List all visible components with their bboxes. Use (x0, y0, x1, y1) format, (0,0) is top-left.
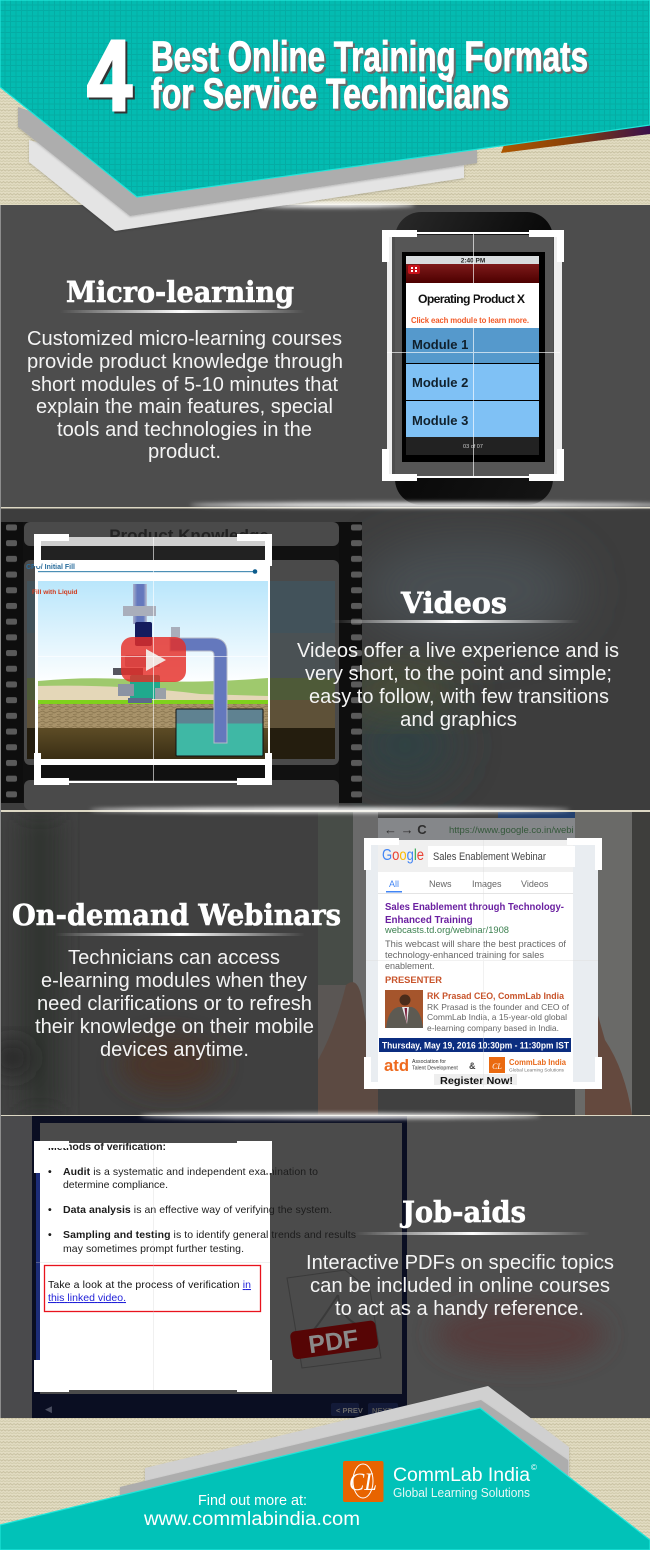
ribbon: grey layer (120, 1400, 568, 1510)
heading: on-demand webinars: On-demand Webinars (12, 898, 341, 932)
text: webinars description: their knowledge on their mobile (35, 1015, 314, 1038)
text: micro-learning description: explain the main features, special (36, 395, 333, 418)
video still: pump illustration: CPU/ Initial Fill (26, 564, 75, 571)
icon: smartphone: 03 of 07 (463, 444, 483, 450)
job aid document: may sometimes prompt further testing. (63, 1243, 244, 1255)
search result screenshot: Images (472, 879, 502, 889)
text: micro-learning description: tools and technologies in the (57, 418, 312, 441)
ribbon: grey layer (18, 107, 477, 216)
callout: linked video: Take a look at the process of verification in (48, 1279, 251, 1291)
browser toolbar: https://www.google.co.in/webi (449, 825, 574, 836)
crop frame: webinar (364, 838, 602, 1089)
icon: play button (121, 637, 186, 682)
photo: presenter (385, 990, 423, 1028)
text: micro-learning description: short modules of 5-10 minutes that (31, 373, 338, 396)
job aid document: Data analysis is an effective way of verifying the system. (63, 1204, 332, 1216)
logo: CommLab India (343, 1461, 384, 1502)
crop frame: job aid (34, 1141, 272, 1392)
search result screenshot: Register Now! (440, 1075, 513, 1087)
teal banner shape (0, 1408, 650, 1550)
icon: search engine logo: Google (382, 847, 424, 864)
text: videos description: easy to follow, with few transitions (309, 685, 609, 708)
search result screenshot: Videos (521, 879, 549, 889)
search result screenshot: News (429, 879, 452, 889)
crop frame: phone (382, 230, 564, 481)
search result screenshot: CL (492, 1062, 502, 1071)
course player window: ◀ (45, 1404, 52, 1414)
text: videos description: very short, to the point and simple; (305, 662, 612, 685)
callout: linked video: this linked video. (48, 1292, 126, 1304)
text: company name: CommLab India (393, 1465, 530, 1486)
text: videos description (297, 639, 619, 731)
search result screenshot: e-learning company based in India. (427, 1023, 559, 1033)
video still: pump illustration: Fill with Liquid (32, 589, 78, 596)
search result screenshot: Sales Enablement Webinar (433, 851, 546, 863)
title number: 4 (87, 20, 132, 132)
text: job-aids description: Interactive PDFs on specific topics (306, 1251, 614, 1274)
icon: pdf document: PDF (307, 1325, 360, 1359)
icon: pdf document (287, 1270, 381, 1368)
text: webinars description: need clarifications or to refresh (37, 992, 312, 1015)
icon: smartphone: 2:40 PM (461, 258, 485, 264)
icon: smartphone: Click each module to learn more. (411, 316, 529, 325)
text: company name: Global Learning Solutions (393, 1486, 530, 1500)
search result screenshot: Association for (412, 1059, 446, 1065)
icon: hands holding tablet (318, 982, 632, 1115)
crop frame: video (34, 534, 272, 785)
search result screenshot: technology-enhanced training for sales (385, 950, 545, 960)
text: videos description: Videos offer a live experience and is (297, 639, 619, 662)
footer banner (0, 1386, 650, 1550)
icon: smartphone (395, 212, 553, 505)
text: micro-learning description: provide product knowledge through (27, 350, 343, 373)
search result screenshot (366, 840, 598, 1087)
text: company name: © (531, 1463, 537, 1472)
search result screenshot: Talent Development (412, 1066, 458, 1072)
icon: smartphone: Module 1 (412, 337, 468, 352)
icon: smartphone: Module 2 (412, 375, 468, 390)
search result screenshot: All (389, 879, 399, 889)
text: micro-learning description: Customized micro-learning courses (27, 327, 342, 350)
text: micro-learning description: product. (148, 440, 221, 463)
search result screenshot: Enhanced Training (385, 915, 473, 926)
search result screenshot: RK Prasad is the founder and CEO of (427, 1002, 570, 1012)
search result screenshot: RK Prasad CEO, CommLab India (427, 991, 565, 1001)
ribbon: light layer (145, 1386, 569, 1500)
browser toolbar: ← → C (384, 822, 427, 837)
panel: videos (0, 508, 650, 810)
text: webinars description: Technicians can access (68, 946, 280, 969)
heading: job-aids: Job-aids (399, 1195, 526, 1229)
job aid document (36, 1141, 356, 1390)
text: find out more: Find out more at: (198, 1493, 307, 1509)
teal banner shape (0, 0, 650, 197)
search result screenshot: & (469, 1061, 476, 1071)
icon: smartphone: Operating Product X (418, 292, 526, 306)
job aid document: • (48, 1204, 52, 1216)
text: job-aids description: to act as a handy reference. (335, 1297, 584, 1320)
search result screenshot: Global Learning Solutions (509, 1068, 565, 1074)
search result screenshot: Thursday, May 19, 2016 10:30pm - 11:30pm IST (382, 1040, 569, 1050)
search result screenshot: CommLab India (509, 1058, 567, 1067)
header banner (0, 0, 650, 231)
text: job-aids description (306, 1251, 614, 1320)
job aid document: Audit is a systematic and independent examination to (63, 1166, 318, 1178)
search result screenshot: Sales Enablement through Technology- (385, 902, 564, 913)
job aid document: • (48, 1229, 52, 1241)
callout: linked video (44, 1266, 260, 1312)
text: webinars description: devices anytime. (100, 1038, 249, 1061)
course player window: NEXT (372, 1406, 392, 1415)
text: micro-learning description (27, 327, 343, 463)
browser toolbar (378, 812, 575, 842)
film strip: Product Knowledge (109, 526, 269, 545)
job aid document: determine compliance. (63, 1179, 168, 1191)
course player window (32, 1116, 407, 1418)
text: webinars description (35, 946, 314, 1061)
icon: smartphone: Module 3 (412, 413, 468, 428)
search result screenshot: CommLab India, a 15-year-old global (427, 1012, 567, 1022)
text: webinars description: e-learning modules when they (41, 969, 308, 992)
logo: CommLab India: CL (349, 1469, 377, 1496)
section divider highlights (0, 202, 650, 1418)
text: videos description: and graphics (400, 708, 517, 731)
panel: job-aids (0, 1116, 650, 1418)
job aid document: Sampling and testing is to identify general trends and results (63, 1229, 356, 1241)
search result screenshot: enablement. (385, 961, 435, 971)
title: for Service Technicians (151, 70, 509, 118)
heading: videos: Videos (400, 586, 507, 620)
title (151, 33, 588, 118)
panel: on-demand webinars (0, 812, 650, 1115)
text: job-aids description: can be included in online courses (310, 1274, 610, 1297)
search result screenshot: PRESENTER (385, 975, 442, 986)
ribbon: orange strip (501, 124, 650, 153)
ribbon: light layer (29, 140, 464, 231)
panel: micro-learning (0, 205, 650, 507)
job aid document: • (48, 1166, 52, 1178)
course player window: < PREV (336, 1406, 363, 1415)
text: company name (393, 1463, 537, 1500)
search result screenshot: webcasts.td.org/webinar/1908 (384, 925, 509, 935)
search result screenshot: This webcast will share the best practices of (385, 939, 567, 949)
search result screenshot: atd (384, 1056, 409, 1075)
video still: pump illustration (26, 537, 270, 765)
heading: micro-learning: Micro-learning (66, 275, 294, 309)
job aid document: Methods of verification: (48, 1141, 166, 1153)
film strip (0, 522, 362, 810)
text: website: www.commlabindia.com (143, 1509, 360, 1530)
